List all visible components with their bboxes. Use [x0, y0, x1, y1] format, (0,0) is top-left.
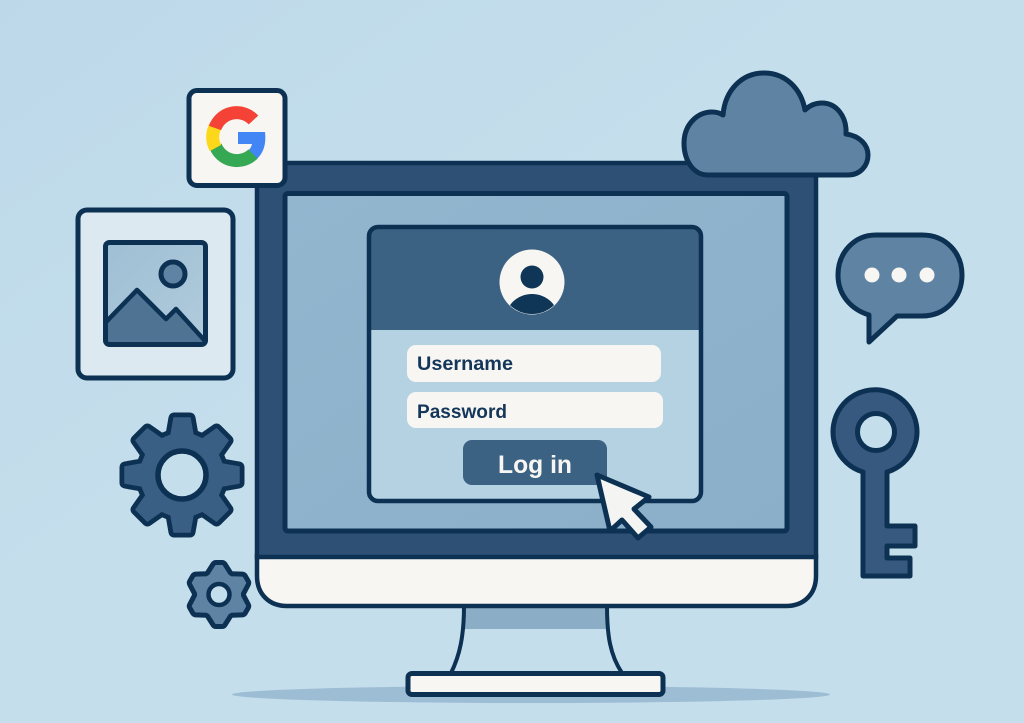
- picture background: [106, 242, 206, 344]
- G green: [216, 146, 253, 161]
- password label: Password: [417, 401, 507, 423]
- panel outline: [369, 227, 701, 501]
- username field: [407, 345, 661, 382]
- username label: Username: [417, 353, 513, 375]
- picture frame: [106, 242, 206, 344]
- icon: large gear: [125, 418, 239, 532]
- password field: [407, 392, 663, 428]
- stand right edge: [607, 606, 622, 673]
- panel header: [369, 227, 701, 330]
- ground shadow: [232, 686, 830, 703]
- bubble dot two: [892, 268, 906, 282]
- G blue: [238, 132, 265, 159]
- icon: cloud: [684, 73, 868, 175]
- icon: key: [833, 390, 917, 576]
- G yellow: [213, 126, 216, 148]
- stand left edge: [451, 606, 464, 673]
- login panel: [369, 227, 701, 501]
- bubble dot one: [864, 268, 880, 282]
- small gear outline: [193, 566, 245, 623]
- button label: Log in: [498, 451, 572, 479]
- icon: small gear: [193, 566, 245, 623]
- button shape: [463, 440, 607, 485]
- icon: speech bubble: [838, 235, 962, 342]
- icon: image card: [78, 210, 233, 378]
- bubble shape: [838, 235, 962, 342]
- G red: [215, 113, 254, 128]
- avatar shoulders: [510, 294, 554, 314]
- panel body: [369, 227, 701, 501]
- picture mountains: [105, 290, 206, 345]
- monitor bezel: [257, 163, 816, 557]
- monitor screen: [285, 194, 787, 531]
- username box: [407, 345, 661, 382]
- small gear hole: [208, 584, 230, 605]
- login button: [463, 440, 607, 485]
- large gear hole: [158, 451, 206, 499]
- avatar: [500, 250, 564, 314]
- key hole: [858, 414, 894, 450]
- card tile: [78, 210, 233, 378]
- icon: google badge: [189, 90, 285, 186]
- large gear outline: [125, 418, 239, 532]
- monitor base: [408, 674, 663, 694]
- icon: cursor arrow: [597, 475, 651, 538]
- avatar head: [520, 266, 544, 288]
- badge tile: [189, 90, 285, 186]
- monitor chin: [257, 556, 816, 606]
- stand shade: [465, 606, 606, 629]
- picture sun: [161, 262, 185, 286]
- google G: [213, 113, 265, 161]
- large gear fill: [125, 418, 239, 532]
- password box: [407, 392, 663, 428]
- bubble dot three: [920, 268, 934, 282]
- monitor: [257, 163, 816, 606]
- key body: [833, 390, 917, 576]
- small gear fill: [193, 566, 245, 623]
- monitor stand: [451, 606, 622, 673]
- avatar disc: [500, 250, 564, 314]
